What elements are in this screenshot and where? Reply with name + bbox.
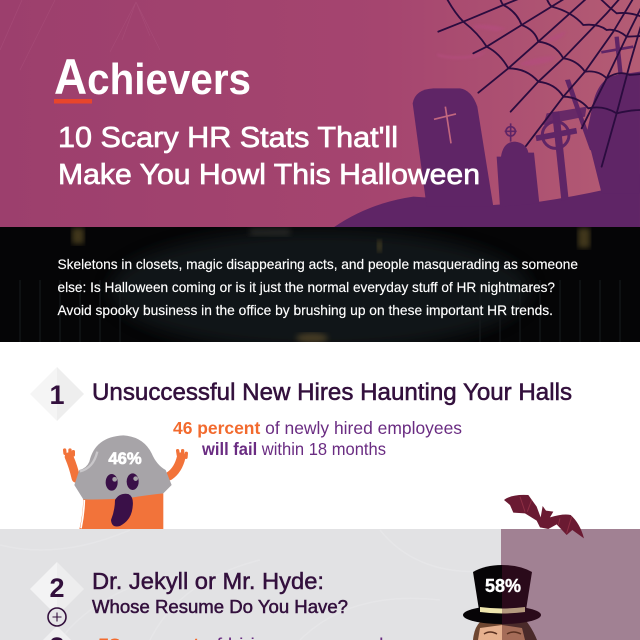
diamond number 2: 2 xyxy=(49,573,65,603)
intro text: Avoid spooky business in the office by brushing up on these important HR trends. xyxy=(58,303,553,318)
hat percentage: 58% xyxy=(485,576,521,596)
tombstone large xyxy=(413,88,493,207)
title xyxy=(60,126,478,185)
stat text 1: will fail within 18 months xyxy=(201,439,386,459)
plus button xyxy=(48,608,66,626)
cross on large tombstone xyxy=(434,107,456,143)
diamond number 2 xyxy=(30,562,84,616)
ground xyxy=(334,190,640,227)
stat text 1: 46 percent of newly hired employees xyxy=(173,418,462,438)
right tinted panel xyxy=(501,529,640,640)
title: 10 Scary HR Stats That'll xyxy=(58,122,398,154)
header banner xyxy=(0,0,640,230)
celtic cross xyxy=(536,112,577,200)
logo underline xyxy=(54,99,92,104)
heading 1: Unsuccessful New Hires Haunting Your Halls xyxy=(92,379,572,406)
clouds xyxy=(480,26,536,64)
hair and face xyxy=(473,622,537,640)
subheading 2: Whose Resume Do You Have? xyxy=(92,597,348,617)
intro text: else: Is Halloween coming or is it just the normal everyday stuff of HR nightmares? xyxy=(58,280,555,295)
diamond number 3 xyxy=(43,626,71,640)
small cross xyxy=(505,123,517,142)
logo: Achievers xyxy=(54,49,251,105)
intro text xyxy=(58,257,578,318)
heading 2: Dr. Jekyll or Mr. Hyde: xyxy=(92,568,324,594)
title: Make You Howl This Halloween xyxy=(58,159,480,191)
intro band xyxy=(0,227,640,350)
ghost tombstone character: 46% xyxy=(108,449,142,468)
ghost tombstone character xyxy=(65,435,186,529)
diamond number 1 xyxy=(30,367,84,421)
spider web xyxy=(438,0,640,167)
tombstone domed xyxy=(497,142,539,207)
section 1 xyxy=(0,342,640,529)
right tombstone xyxy=(587,72,640,193)
graveyard silhouettes xyxy=(330,37,640,230)
top hat character xyxy=(463,565,541,640)
diamond number 1: 1 xyxy=(49,380,65,410)
leaning tombstone edge xyxy=(565,79,591,150)
hat xyxy=(463,565,502,624)
bat xyxy=(504,495,584,538)
night scene xyxy=(20,228,620,350)
intro text: Skeletons in closets, magic disappearing acts, and people masquerading as someone xyxy=(58,257,578,272)
section 2 xyxy=(0,529,640,640)
stat text 1 xyxy=(173,418,462,459)
